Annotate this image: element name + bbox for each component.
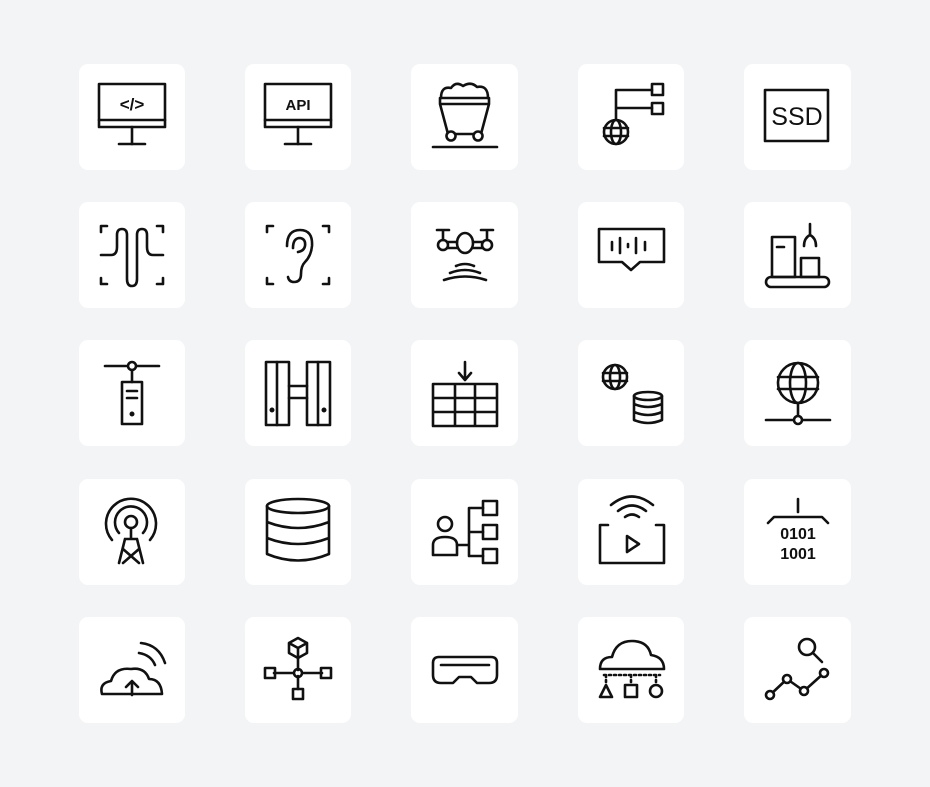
tile: cloud shapes	[578, 617, 684, 723]
tile: hanging server	[79, 340, 185, 446]
tile: globe hierarchy	[578, 64, 684, 170]
tile: SSD	[744, 64, 851, 170]
tile: video signal	[578, 479, 684, 585]
tile: antenna tower	[79, 479, 185, 585]
tile: binary: 1001	[780, 546, 816, 563]
tile: binary: 0101	[780, 526, 816, 543]
tile: drone	[411, 202, 518, 308]
tile: code monitor: </>	[120, 95, 144, 114]
tile: speech waveform	[578, 202, 684, 308]
tile: mine cart	[411, 64, 518, 170]
tile: database	[245, 479, 351, 585]
tile: ear scan	[245, 202, 351, 308]
tile: code monitor	[79, 64, 185, 170]
tile: globe database	[578, 340, 684, 446]
tile: cloud upload	[79, 617, 185, 723]
tile: line chart search	[744, 617, 851, 723]
tile: person org chart	[411, 479, 518, 585]
tile: cube network	[245, 617, 351, 723]
tile: globe network	[744, 340, 851, 446]
tile: books shelf	[744, 202, 851, 308]
tile: binary	[744, 479, 851, 585]
tile: table with arrow	[411, 340, 518, 446]
tile: API monitor: API	[285, 97, 311, 114]
tile: VR headset	[411, 617, 518, 723]
tile: SSD: SSD	[771, 103, 823, 131]
tile: cabinets	[245, 340, 351, 446]
tile: fingerprint wave	[79, 202, 185, 308]
tile: API monitor	[245, 64, 351, 170]
